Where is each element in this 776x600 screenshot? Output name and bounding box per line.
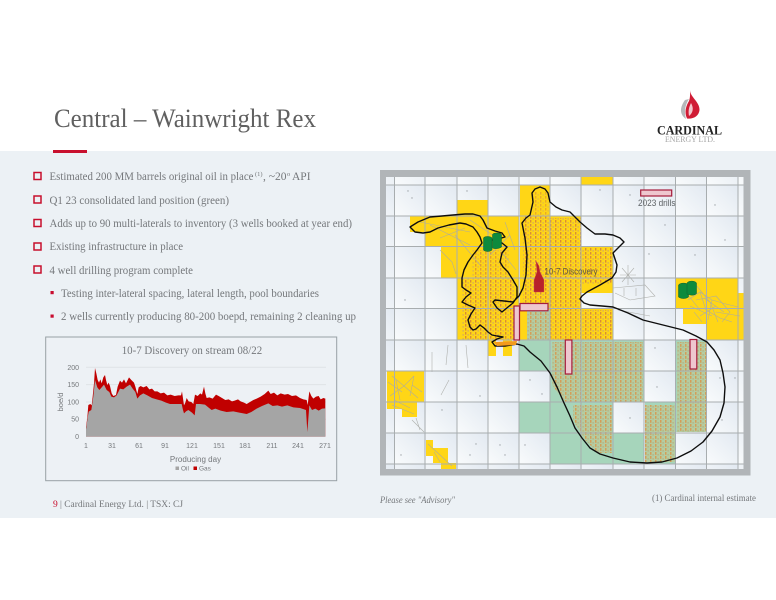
drill location: vertical east — [690, 340, 697, 369]
drill location: horizontal north — [520, 304, 548, 311]
bullet 1: o — [287, 171, 290, 178]
panel: land map — [380, 170, 750, 476]
title: Central – Wainwright Rex — [54, 104, 316, 133]
drill location: 2023 legend bar — [641, 190, 672, 196]
y axis labels: 0 — [75, 434, 79, 441]
series: gas (red area) — [86, 368, 325, 437]
y axis title: boe/d — [56, 393, 65, 411]
y axis labels: 100 — [67, 400, 79, 406]
x axis labels: 271 — [319, 443, 331, 450]
icon: green tanks east — [678, 281, 696, 298]
sub-bullet 2: 2 wells currently producing 80-200 boepd, remaining 2 cleaning up — [61, 311, 356, 323]
x axis title: Producing day — [170, 455, 221, 464]
bullet 1: , ~20 — [263, 171, 287, 183]
chart legend: Oil — [181, 466, 190, 472]
bullet 1: (1) — [255, 171, 263, 178]
bullet 1: Estimated 200 MM barrels original oil in place — [50, 171, 254, 183]
orange infrastructure patch — [494, 341, 517, 346]
label: 2023 drills: 2023 drills — [638, 198, 676, 208]
bullet 3: Adds up to 90 multi-laterals to inventory (3 wells booked at year end) — [50, 218, 352, 230]
logo: Cardinal Energy: CARDINAL — [657, 122, 722, 138]
bullet 2: Q1 23 consolidated land position (green) — [50, 195, 229, 207]
chart legend: Gas — [199, 466, 212, 472]
bullet list — [34, 171, 356, 323]
panel: slide background — [0, 151, 776, 518]
y axis labels: 200 — [67, 365, 79, 372]
x axis labels: 241 — [292, 443, 304, 450]
bullet 1: API — [292, 171, 311, 183]
sub-bullet 1: Testing inter-lateral spacing, lateral length, pool boundaries — [61, 288, 319, 300]
drill location: vertical central — [565, 340, 572, 374]
x axis labels: 181 — [239, 443, 251, 450]
township grid — [386, 177, 744, 469]
scattered wells — [400, 189, 736, 456]
pool boundary outline — [410, 187, 725, 463]
icon: green tanks central — [484, 233, 502, 252]
logo: Cardinal Energy — [657, 90, 722, 144]
bullet 5: 4 well drilling program complete — [50, 265, 193, 277]
series: oil (gray area) — [86, 380, 325, 437]
chart legend — [176, 466, 212, 472]
horizontal well laterals — [462, 192, 707, 462]
label: 10-7 Discovery: 10-7 Discovery — [544, 266, 598, 276]
drill location: vertical north — [514, 306, 520, 340]
footer: page number and company: 9 — [53, 500, 58, 510]
logo: Cardinal Energy: ENERGY LTD. — [665, 135, 715, 144]
x axis labels: 151 — [213, 443, 225, 450]
y axis labels — [67, 365, 79, 441]
footer: advisory note: Please see "Advisory" — [379, 495, 455, 505]
y axis gridlines — [86, 367, 326, 419]
x axis labels: 211 — [266, 443, 278, 450]
map frame — [380, 170, 750, 476]
y axis labels: 150 — [67, 382, 79, 389]
existing gathering lines — [388, 220, 740, 466]
chart title: 10-7 Discovery on stream 08/22 — [122, 343, 262, 357]
x axis labels: 91 — [161, 443, 169, 450]
y axis labels: 50 — [71, 416, 79, 424]
x axis labels: 121 — [186, 443, 198, 450]
bullet 4: Existing infrastructure in place — [50, 241, 183, 253]
panel: production chart — [46, 337, 337, 481]
title underline accent — [53, 150, 87, 153]
x axis labels: 61 — [135, 443, 143, 450]
x axis labels: 1 — [84, 443, 88, 450]
icon: 10-7 discovery well — [534, 261, 544, 292]
chart frame — [46, 337, 337, 481]
x axis labels: 31 — [108, 443, 116, 450]
footnote: (1) Cardinal internal estimate — [652, 493, 756, 503]
new land position: green parcels — [519, 310, 707, 464]
x axis labels — [84, 443, 331, 450]
consolidated land: yellow parcels — [387, 177, 744, 469]
footer: page number and company: | Cardinal Energy Ltd. | TSX: CJ — [60, 500, 183, 510]
